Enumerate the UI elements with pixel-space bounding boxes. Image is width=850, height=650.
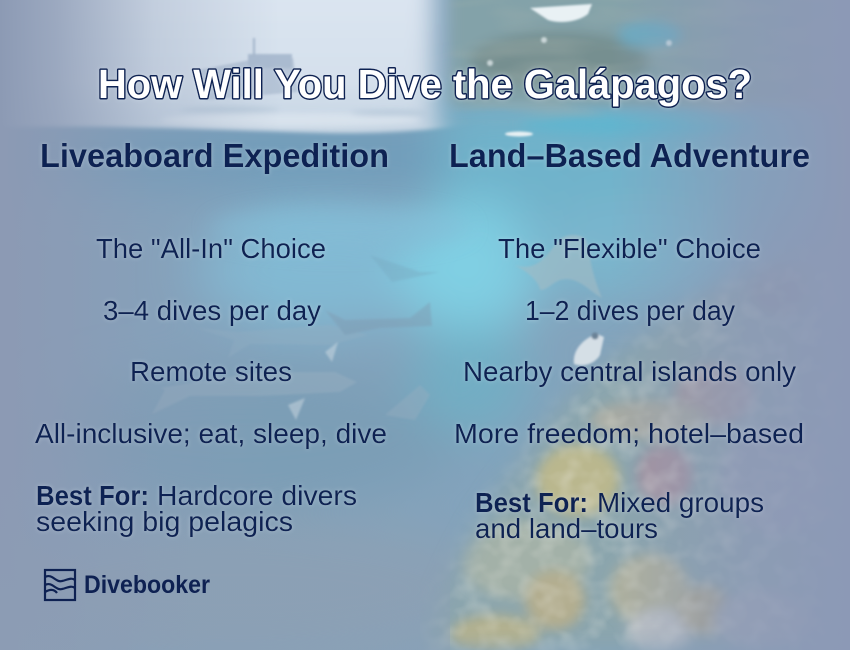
text: more freedom: More freedom; hotel–based	[454, 418, 804, 449]
text: best for land-based: Best For:	[475, 487, 588, 518]
title: How Will You Dive the Galápagos?	[98, 61, 752, 107]
panel: liveaboard expedition	[35, 137, 389, 537]
panel: land-based adventure	[449, 137, 810, 544]
bright column below surface	[210, 206, 470, 250]
text: all-in choice: The "All-In" Choice	[96, 233, 326, 264]
text: best for land-based: and land–tours	[475, 513, 658, 544]
heading: land-based: Land–Based Adventure	[449, 137, 810, 174]
boat silhouette	[198, 38, 298, 100]
icon: waves in a square	[45, 570, 75, 600]
logo: divebooker	[45, 570, 210, 600]
text: best for liveaboard: seeking big pelagics	[36, 506, 293, 537]
sky above the waterline	[26, 0, 454, 136]
penguin	[574, 332, 604, 365]
sharks	[122, 255, 440, 420]
sea lion	[514, 235, 602, 298]
text: best for land-based	[475, 487, 764, 544]
text: best for liveaboard: Hardcore divers	[157, 480, 357, 511]
text: best for liveaboard	[36, 480, 357, 537]
text: nearby islands: Nearby central islands only	[463, 356, 796, 387]
waves below the horizon	[160, 107, 430, 127]
text: all-inclusive: All-inclusive; eat, sleep, dive	[35, 418, 387, 449]
text: dives per day: 1–2 dives per day	[525, 295, 735, 326]
text: best for land-based: Mixed groups	[597, 487, 764, 518]
heading: liveaboard: Liveaboard Expedition	[40, 137, 389, 174]
text: flexible choice: The "Flexible" Choice	[498, 233, 761, 264]
edge vignette	[0, 0, 280, 650]
coral reef	[438, 296, 788, 650]
text: remote sites: Remote sites	[130, 356, 292, 387]
wordmark: Divebooker	[84, 571, 210, 599]
reflection patches	[487, 4, 672, 136]
upper right canopy	[450, 0, 850, 135]
text: best for liveaboard: Best For:	[36, 480, 149, 511]
text: dives per day: 3–4 dives per day	[103, 295, 321, 326]
